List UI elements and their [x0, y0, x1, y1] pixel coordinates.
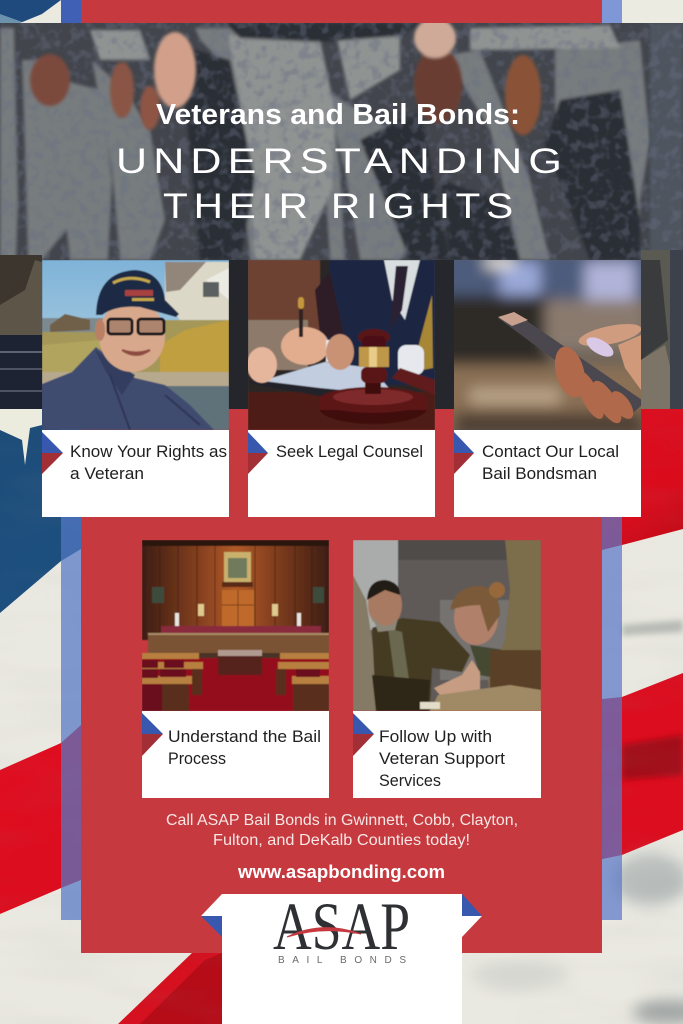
logo: ASAP Bail Bonds: BAIL BONDS — [278, 955, 406, 966]
logo: ASAP Bail Bonds: ASAP — [273, 888, 410, 964]
photo: soldiers consoling — [353, 540, 541, 711]
card text: Seek Legal Counsel — [276, 442, 423, 461]
title — [116, 99, 568, 226]
lower margins — [0, 255, 42, 305]
panel: card 1 know your rights — [42, 260, 229, 517]
icon: chevron — [142, 713, 163, 756]
card text: a Veteran — [70, 464, 144, 483]
photo: hands holding phone — [454, 260, 641, 430]
card text: Services — [379, 771, 441, 790]
call to action text: Fulton, and DeKalb Counties today! — [213, 832, 470, 849]
panel: card 2 seek legal counsel — [247, 260, 435, 517]
photo: gavel and signing — [247, 260, 435, 430]
logo ribbon panel — [201, 888, 482, 1024]
panel: card 5 follow up — [353, 540, 541, 798]
call to action text — [166, 812, 518, 849]
icon: chevron — [353, 713, 374, 756]
call to action text: Call ASAP Bail Bonds in Gwinnett, Cobb, Clayton, — [166, 812, 518, 829]
card text — [70, 442, 227, 483]
card text: Veteran Support — [379, 749, 505, 768]
photo: courtroom — [142, 540, 329, 711]
title line: understanding: UNDERSTANDING — [116, 142, 568, 181]
card text: Bail Bondsman — [482, 464, 597, 483]
icon: chevron — [248, 432, 268, 474]
title line: their rights: THEIR RIGHTS — [163, 187, 519, 226]
card text: Process — [168, 749, 226, 768]
card text: Understand the Bail — [168, 727, 321, 746]
card text: Follow Up with — [379, 727, 492, 746]
title line: subject: Veterans and Bail Bonds: — [156, 99, 520, 131]
card text: Know Your Rights as — [70, 442, 227, 461]
panel: top red band — [81, 0, 602, 23]
hands — [30, 18, 541, 135]
background: top flag strip — [0, 0, 683, 23]
red main panel — [81, 409, 602, 953]
card text — [379, 727, 505, 790]
icon: chevron — [42, 432, 63, 474]
card text: Contact Our Local — [482, 442, 619, 461]
card text — [482, 442, 619, 483]
panel: card 4 understand bail process — [142, 540, 329, 798]
background: soldiers in camouflage — [0, 18, 683, 409]
website url: www.asapbonding.com — [237, 862, 445, 882]
panel: card 3 contact bondsman — [454, 260, 641, 517]
icon: chevron — [454, 432, 474, 474]
blue accent strips behind panel — [61, 409, 622, 920]
photo: veteran in cap — [42, 260, 229, 430]
card text — [168, 727, 321, 768]
